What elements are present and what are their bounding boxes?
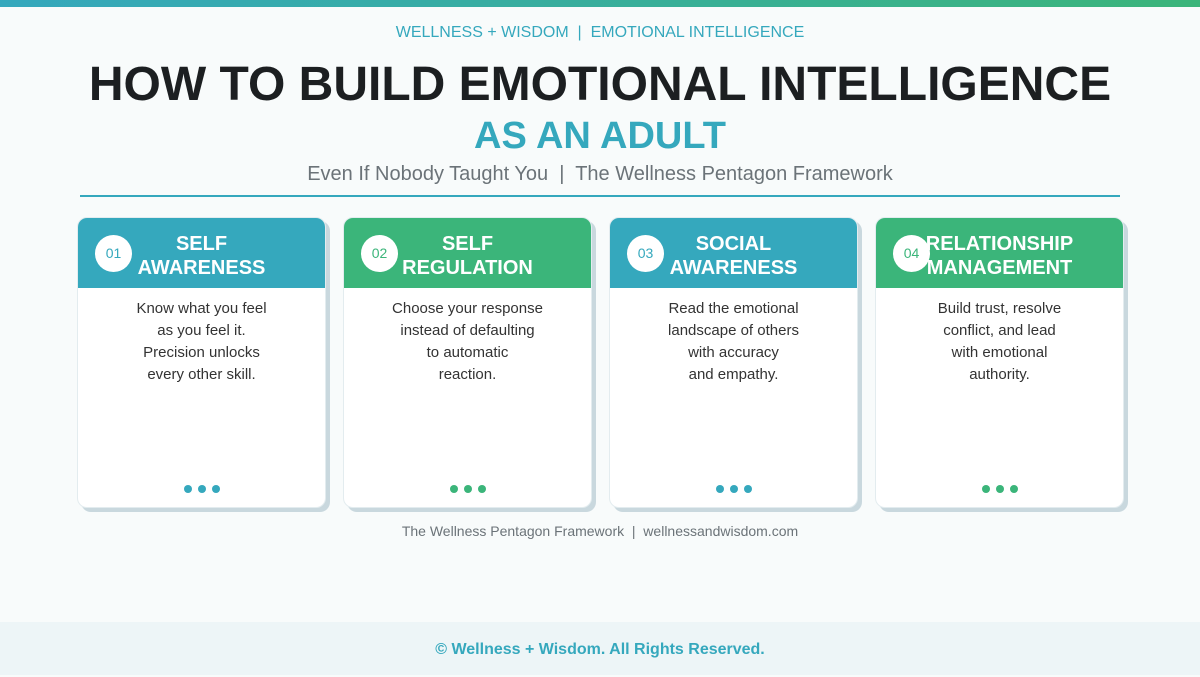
dots [982,485,1018,493]
source line: The Wellness Pentagon Framework | wellnessandwisdom.com [402,523,798,539]
card text: instead of defaulting [400,322,535,339]
card text: authority. [969,366,1030,383]
card text: conflict, and lead [943,322,1056,339]
card text: Precision unlocks [143,344,260,361]
card text: as you feel it. [157,322,246,339]
card text: every other skill. [147,366,256,383]
card header: SOCIAL [696,233,771,255]
card text: to automatic [427,344,508,361]
subtitle heading: AS AN ADULT [474,115,726,157]
tagline: Even If Nobody Taught You | The Wellness Pentagon Framework [307,163,893,185]
footer band [0,622,1200,675]
card header: 03 [638,245,653,261]
card header: 01 [106,245,121,261]
card text: Choose your response [392,300,543,317]
card header: SELF [176,233,227,255]
card text: and empathy. [689,366,778,383]
card text: with emotional [952,344,1047,361]
card header [78,218,325,288]
card header: 04 [904,245,919,261]
top gradient bar [0,0,1200,7]
card header: AWARENESS [138,257,265,279]
footer band: © Wellness + Wisdom. All Rights Reserved. [435,641,765,658]
card text: Read the emotional [668,300,799,317]
card header: REGULATION [402,257,533,279]
card text: landscape of others [668,322,799,339]
card text [668,300,799,383]
card header: RELATIONSHIP [926,233,1073,255]
card header: MANAGEMENT [927,257,1072,279]
card header [876,218,1123,288]
card header: AWARENESS [670,257,797,279]
dots [450,485,486,493]
card 4: relationship management [875,217,1124,508]
card 3: social awareness [609,217,858,508]
card text: Know what you feel [136,300,267,317]
kicker label: WELLNESS + WISDOM | EMOTIONAL INTELLIGENCE [396,24,804,41]
card text [136,300,267,383]
card header: 02 [372,245,387,261]
card 1: self awareness [77,217,326,508]
card text [392,300,543,383]
card 2: self regulation [343,217,592,508]
title: HOW TO BUILD EMOTIONAL INTELLIGENCE [89,58,1111,111]
card text: Build trust, resolve [938,300,1061,317]
card header [344,218,591,288]
card text: with accuracy [688,344,779,361]
card text: reaction. [439,366,496,383]
card header: SELF [442,233,493,255]
dots [716,485,752,493]
card text [938,300,1061,383]
dots [184,485,220,493]
card header [610,218,857,288]
